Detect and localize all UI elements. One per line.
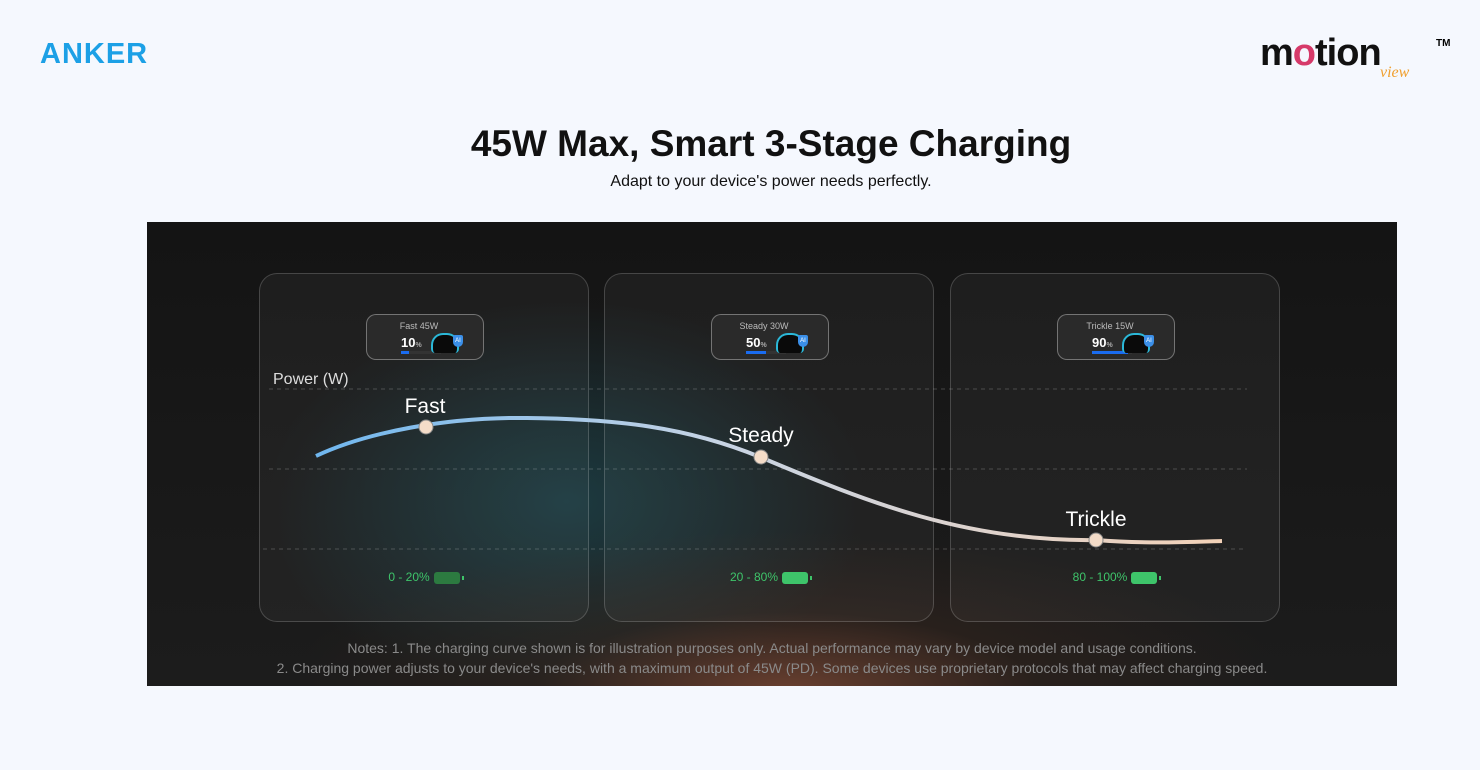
pill: trickle 15W: 90% — [1092, 335, 1113, 350]
pill: steady 30W: AI — [800, 338, 806, 344]
curve chart: Power (W) — [273, 371, 349, 388]
pill: trickle 15W — [1057, 314, 1175, 360]
pill: fast 45W: AI — [455, 338, 461, 344]
range 20-80% — [730, 570, 812, 584]
pill: fast 45W: 10% — [401, 335, 422, 350]
card: fast — [259, 273, 589, 622]
title: 45W Max, Smart 3-Stage Charging — [471, 123, 1071, 164]
range 80-100% — [1073, 570, 1161, 584]
range 0-20% — [388, 570, 464, 584]
notes: Notes: 1. The charging curve shown is for illustration purposes only. Actual performance may vary by device model and usage conditions. — [347, 640, 1197, 656]
range 0-20%: 0 - 20% — [388, 570, 430, 584]
notes: 2. Charging power adjusts to your device's needs, with a maximum output of 45W (PD). Some devices use proprietary protocols that may affect charging speed. — [277, 660, 1267, 676]
curve chart — [263, 371, 1247, 550]
notes — [277, 640, 1267, 676]
card: steady — [604, 273, 934, 622]
range 20-80%: 20 - 80% — [730, 570, 778, 584]
pill: steady 30W: 50% — [746, 335, 767, 350]
pill: fast 45W: Fast 45W — [400, 321, 438, 331]
curve chart: Fast — [405, 395, 446, 418]
pill: fast 45W — [366, 314, 484, 360]
card: trickle — [950, 273, 1280, 622]
pill: steady 30W — [711, 314, 829, 360]
pill: steady 30W: Steady 30W — [739, 321, 789, 331]
logo: motion view: motion — [1260, 32, 1381, 74]
curve chart: Steady — [728, 424, 794, 447]
subtitle: Adapt to your device's power needs perfectly. — [610, 173, 932, 190]
pill: trickle 15W: Trickle 15W — [1086, 321, 1134, 331]
logo: motion view: view — [1380, 64, 1409, 81]
panel: chart dark — [147, 222, 1397, 686]
logo: motion view: TM — [1436, 38, 1450, 49]
range 80-100%: 80 - 100% — [1073, 570, 1127, 584]
curve chart: Trickle — [1065, 508, 1127, 531]
pill: trickle 15W: AI — [1146, 338, 1152, 344]
logo: motion view — [1260, 32, 1450, 81]
logo: anker: ANKER — [40, 38, 148, 70]
